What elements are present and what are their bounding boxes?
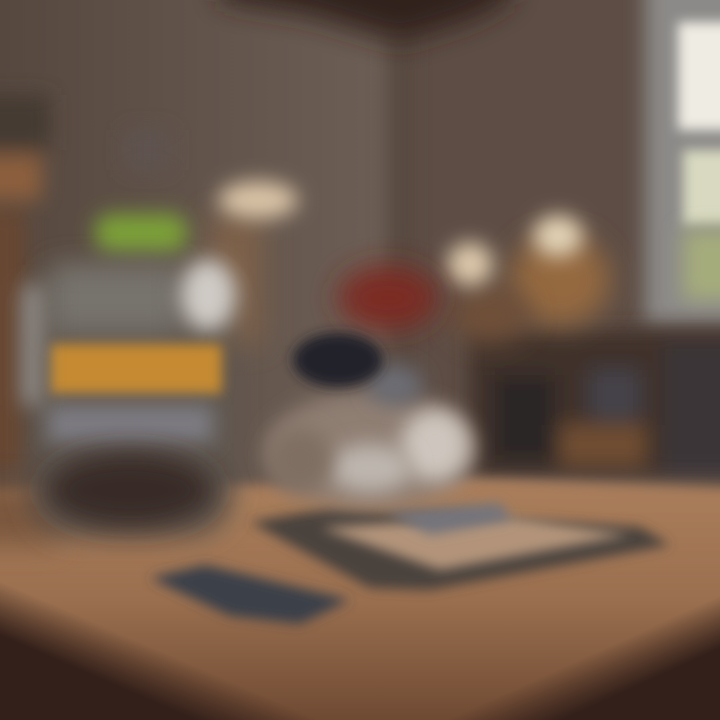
jar upper contents <box>50 265 180 333</box>
phone <box>150 565 350 624</box>
jar <box>22 214 236 535</box>
jar body <box>32 270 232 535</box>
window <box>645 0 720 325</box>
jar dark base <box>45 452 215 528</box>
ceiling <box>220 0 510 42</box>
left shelf <box>0 95 170 470</box>
jar orange band <box>50 344 222 394</box>
table <box>0 478 720 720</box>
lamp: upper left <box>208 181 298 345</box>
dark hat <box>293 333 383 387</box>
lamps: right pair <box>447 215 610 343</box>
jar grey layer <box>48 405 213 443</box>
book stack <box>250 503 670 590</box>
foreground shadow: left corner <box>0 540 340 720</box>
right furniture <box>470 330 720 475</box>
jar lid <box>95 214 187 252</box>
cloth bundle <box>265 365 475 508</box>
red object <box>338 266 438 330</box>
foreground shadow: right corner <box>440 560 720 720</box>
